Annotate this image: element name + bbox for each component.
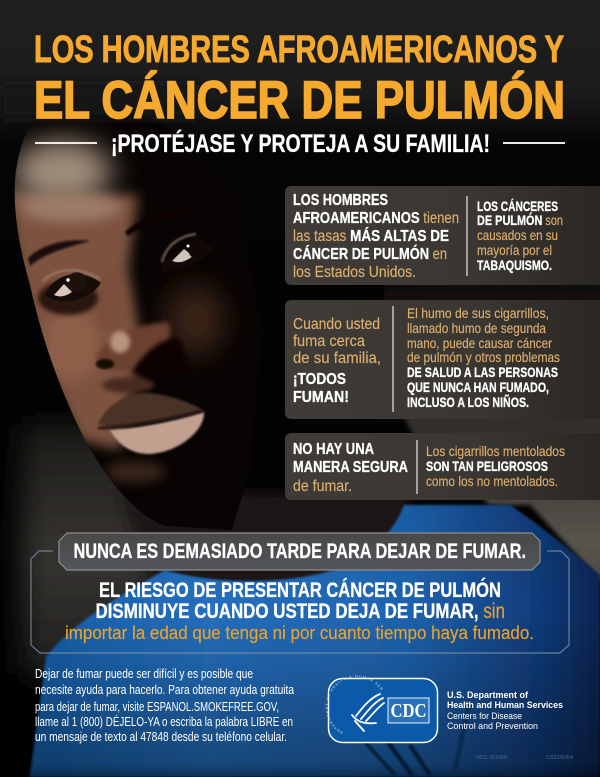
chin glow — [105, 462, 165, 482]
right text: causados en su — [477, 227, 558, 243]
right text: LOS CÁNCERES — [477, 198, 558, 214]
right text: QUE NUNCA HAN FUMADO, — [407, 379, 549, 395]
neck — [120, 490, 410, 590]
nose bridge glow — [97, 268, 123, 332]
shirt shading — [30, 505, 600, 777]
left text — [293, 192, 459, 281]
left text: de fumar. — [293, 478, 352, 495]
right text: TABAQUISMO. — [477, 257, 552, 273]
HHS agency text — [447, 690, 563, 731]
blue shirt — [30, 505, 600, 777]
right text: DE SALUD A LAS PERSONAS — [407, 364, 558, 380]
subtitle: ¡PROTÉJASE Y PROTEJA A SU FAMILIA! — [111, 129, 490, 158]
upper lip — [98, 393, 205, 428]
left text: MANERA SEGURA — [293, 459, 408, 476]
publication codes — [476, 755, 573, 761]
help text: un mensaje de texto al 47848 desde su teléfono celular. — [35, 730, 287, 744]
right text — [477, 198, 563, 273]
left text: LOS HOMBRES — [293, 192, 388, 209]
nostril — [96, 359, 114, 369]
HHS agency text: U.S. Department of — [447, 690, 529, 700]
dark gray backdrop left of the face — [22, 425, 192, 675]
left text: de su familia, — [293, 350, 381, 367]
nose side — [96, 322, 170, 371]
left text: AFROAMERICANOS tienen — [293, 210, 459, 227]
callout text — [65, 578, 534, 643]
CDC logo — [326, 675, 438, 744]
shirt folds — [365, 700, 470, 775]
callout text: DISMINUYE CUANDO USTED DEJA DE FUMAR, sin — [96, 600, 505, 623]
left text — [293, 441, 408, 495]
left cheek glow — [44, 309, 100, 381]
panel: no safe way to smoke — [285, 433, 600, 500]
left text: NO HAY UNA — [293, 441, 374, 458]
right text: Los cigarrillos mentolados — [426, 443, 565, 459]
right text — [407, 305, 560, 410]
panel: higher lung cancer rates — [285, 186, 600, 285]
left text: ¡TODOS — [293, 371, 346, 388]
left brow — [28, 240, 90, 266]
lower lip — [110, 412, 204, 454]
lit side of face — [5, 190, 142, 450]
CDC box: CDC — [390, 700, 426, 722]
philtrum — [102, 377, 154, 393]
lit backdrop right of the head — [375, 190, 600, 580]
left text — [293, 316, 381, 406]
callout heading pill — [59, 533, 540, 570]
right brow — [124, 220, 144, 237]
right text: INCLUSO A LOS NIÑOS. — [407, 393, 529, 410]
help text: Dejar de fumar puede ser difícil y es posible que — [35, 667, 253, 681]
right eye — [160, 234, 214, 273]
right text: llamado humo de segunda — [407, 320, 546, 336]
callout text: importar la edad que tenga ni por cuanto tiempo haya fumado. — [65, 623, 534, 643]
publication codes: NCC-111008 — [476, 755, 507, 761]
callout frame — [31, 551, 569, 653]
panel: secondhand smoke — [285, 300, 600, 419]
right text: mano, puede causar cáncer — [407, 335, 552, 351]
publication codes: CS216064 — [546, 755, 573, 761]
fade at the top of the head — [0, 85, 200, 119]
icon: HHS seal ring: DEPARTMENT OF HEALTH & HUMAN SERVICES · USA — [326, 675, 382, 734]
callout text: EL RIESGO DE PRESENTAR CÁNCER DE PULMÓN — [99, 578, 501, 602]
shadow under nose — [132, 339, 190, 378]
head — [14, 122, 246, 530]
right text — [426, 443, 565, 489]
lip line — [98, 410, 204, 428]
left text: Cuando usted — [293, 316, 380, 333]
left text: las tasas MÁS ALTAS DE — [293, 226, 449, 245]
help text: llame al 1 (800) DÉJELO-YA o escriba la palabra LIBRE en — [35, 714, 293, 729]
right text: El humo de sus cigarrillos, — [407, 305, 549, 321]
left text: los Estados Unidos. — [293, 264, 416, 281]
right text: mayoría por el — [477, 242, 552, 258]
left text: CÁNCER DE PULMÓN en — [293, 244, 447, 263]
icon: HHS eagle — [352, 694, 384, 731]
right text: de pulmón y otros problemas — [407, 349, 560, 365]
forehead centre glow — [22, 195, 122, 221]
left text: FUMAN! — [293, 389, 349, 406]
right text: SON TAN PELIGROSOS — [426, 458, 548, 474]
right text: como los no mentolados. — [426, 473, 558, 489]
nose tip highlight — [110, 331, 130, 353]
help text — [35, 667, 294, 744]
HHS agency text: Centers for Disease — [447, 711, 522, 721]
right text: DE PULMÓN son — [477, 211, 563, 228]
HHS agency text: Control and Prevention — [447, 721, 538, 731]
help text: necesite ayuda para hacerlo. Para obtener ayuda gratuita — [35, 683, 294, 697]
title — [34, 29, 565, 130]
right cheek glow — [165, 284, 225, 356]
forehead highlight — [12, 140, 112, 204]
HHS agency text: Health and Human Services — [447, 700, 563, 710]
left eye — [43, 270, 101, 301]
left eye socket — [38, 281, 98, 315]
help text: para dejar de fumar, visite ESPANOL.SMOKEFREE.GOV, — [35, 700, 279, 714]
left text: fuma cerca — [293, 333, 365, 350]
